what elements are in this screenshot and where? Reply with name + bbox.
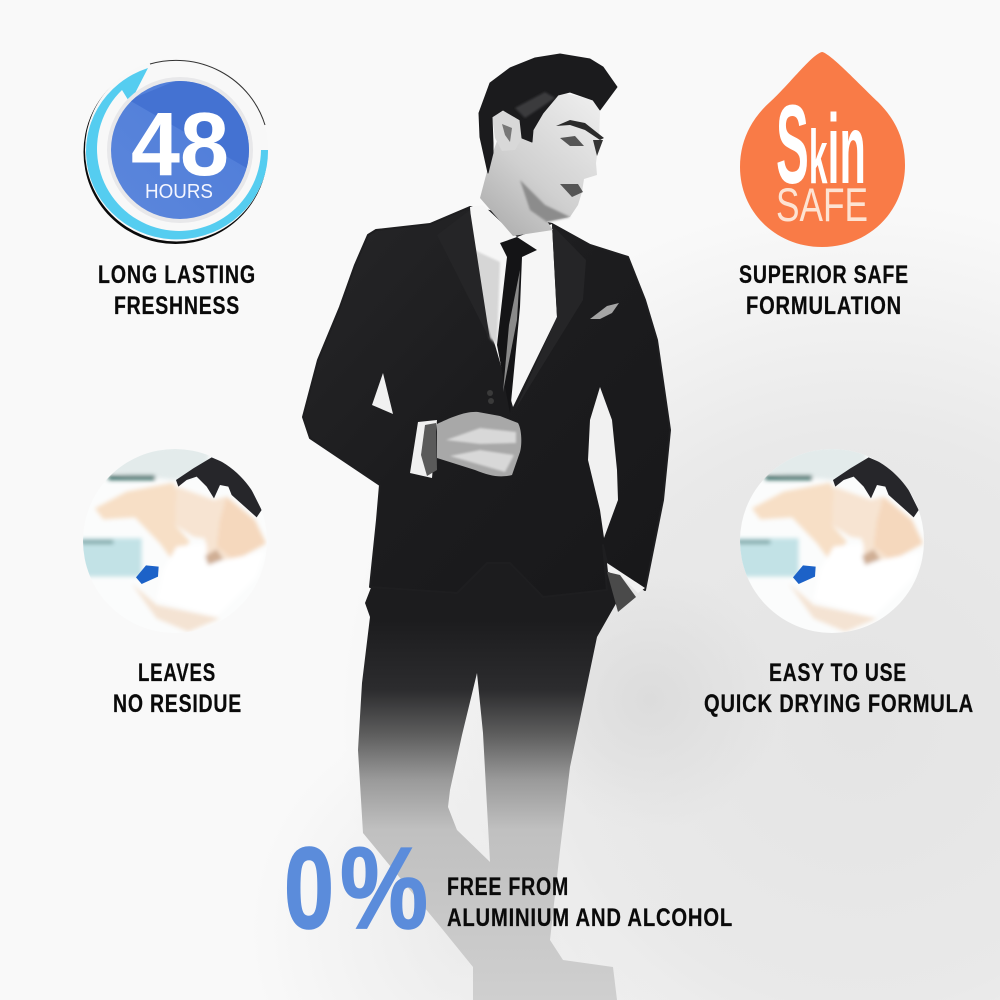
- badge: top hairline: [150, 60, 265, 125]
- label: superior safe formulation: FORMULATION: [746, 292, 902, 320]
- icon: 48 hours badge: [84, 58, 268, 244]
- man: hand highlights: [446, 428, 516, 472]
- man: shirt cuff: [410, 420, 437, 478]
- man: pocket square: [590, 303, 619, 319]
- man: lower cuff and hand: [607, 563, 645, 612]
- badge: white face: [85, 58, 268, 242]
- man: shirt shadow: [474, 250, 500, 345]
- label: easy to use quick drying formula: EASY TO USE: [769, 659, 907, 687]
- man: hair: [479, 54, 617, 173]
- drop shape: [740, 52, 905, 247]
- label: easy to use quick drying formula: [704, 659, 974, 718]
- man: eyebrow eye lips: [556, 120, 604, 197]
- man: arm gaps: [372, 373, 618, 538]
- man: lapel shading: [437, 210, 586, 410]
- callout: 0%: [284, 823, 428, 953]
- drop: Skin: Skin: [776, 83, 866, 208]
- photo: applying roll-on left: [80, 443, 273, 637]
- callout: 0%: 0: [284, 823, 334, 953]
- man: neck and face: [480, 92, 600, 236]
- man: bracelet: [421, 423, 437, 476]
- man: hair sheen: [515, 92, 555, 118]
- label: leaves no residue: LEAVES: [138, 659, 216, 687]
- man: legs with fade: [358, 540, 618, 1000]
- drop: SAFE: SAFE: [776, 178, 868, 231]
- label: free from aluminium and alcohol: [447, 873, 733, 932]
- man: hand: [437, 412, 521, 476]
- label: leaves no residue: NO RESIDUE: [113, 690, 242, 718]
- man figure: [303, 54, 670, 1000]
- badge: blue disc: [111, 81, 249, 219]
- label: long lasting freshness: LONG LASTING: [98, 261, 256, 289]
- badge: grey inner ring: [107, 77, 253, 223]
- man: cheek shadow: [520, 180, 570, 222]
- callout: 0%: %: [340, 823, 428, 953]
- man: jacket buttons: [487, 390, 494, 404]
- man: shirt: [470, 205, 557, 407]
- label: free from aluminium and alcohol: ALUMINIUM AND ALCOHOL: [447, 904, 733, 932]
- man: tie: [497, 237, 537, 413]
- label: long lasting freshness: FRESHNESS: [114, 292, 240, 320]
- man: jacket: [303, 207, 670, 597]
- label: long lasting freshness: [98, 261, 256, 320]
- label: superior safe formulation: SUPERIOR SAFE: [739, 261, 909, 289]
- man: inner ear: [502, 124, 512, 142]
- badge: HOURS: HOURS: [145, 181, 213, 203]
- badge: 48: 48: [131, 95, 229, 195]
- badge: dark band: [131, 81, 249, 168]
- label: superior safe formulation: [739, 261, 909, 320]
- icon: skin safe drop: [740, 52, 905, 247]
- man: ear: [492, 110, 522, 151]
- photo: applying roll-on right: [737, 443, 930, 637]
- badge: black offset ring: [84, 60, 268, 244]
- label: leaves no residue: [113, 659, 242, 718]
- label: free from aluminium and alcohol: FREE FROM: [447, 873, 569, 901]
- badge: cyan progress ring: [86, 68, 268, 239]
